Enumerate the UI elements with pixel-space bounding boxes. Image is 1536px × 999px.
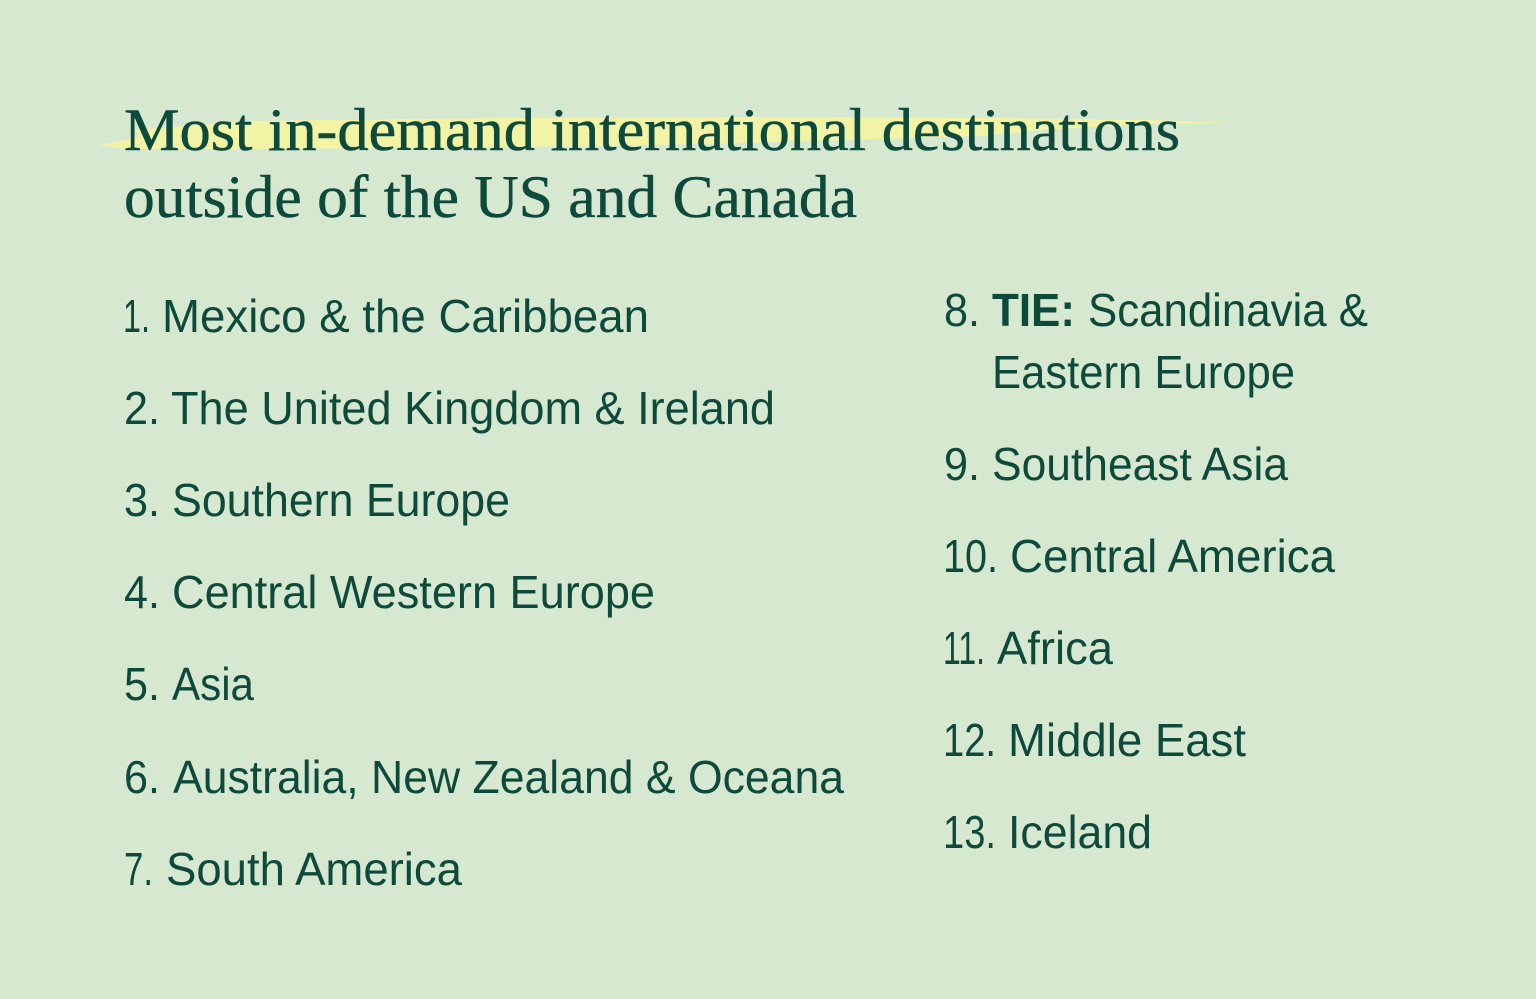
- item 6: Australia, New Zealand & Oceana: [173, 751, 844, 803]
- item 4: Central Western Europe: [172, 566, 655, 618]
- item 11: Africa: [997, 622, 1113, 674]
- item 5: [124, 658, 254, 710]
- item 5: 5.: [124, 658, 160, 710]
- item 8: Scandinavia &: [1088, 284, 1368, 336]
- item 6: 6.: [124, 751, 160, 803]
- item 11: 11.: [943, 622, 985, 674]
- item 7: 7.: [124, 843, 153, 895]
- item 10: 10.: [943, 530, 998, 582]
- title: outside of the US and Canada: [124, 164, 857, 230]
- item 5: Asia: [172, 658, 254, 710]
- item 13: [943, 806, 1152, 858]
- item 1: 1.: [123, 290, 150, 342]
- item 12: 12.: [943, 714, 996, 766]
- item 2: The United Kingdom & Ireland: [171, 382, 775, 434]
- item 8: TIE:: [992, 284, 1075, 336]
- item 8: Eastern Europe: [992, 346, 1295, 398]
- item 8: 8.: [944, 284, 980, 336]
- item 12: Middle East: [1008, 714, 1246, 766]
- item 8: [944, 284, 1368, 398]
- title: [124, 97, 1180, 230]
- title: Most in-demand international destinations: [124, 97, 1180, 163]
- item 13: 13.: [943, 806, 996, 858]
- item 10: Central America: [1010, 530, 1335, 582]
- item 9: 9.: [944, 438, 980, 490]
- item 7: South America: [166, 843, 462, 895]
- left column list: [123, 290, 844, 895]
- item 11: [943, 622, 1113, 674]
- item 4: 4.: [124, 566, 160, 618]
- item 9: Southeast Asia: [992, 438, 1288, 490]
- item 2: 2.: [124, 382, 160, 434]
- item 13: Iceland: [1008, 806, 1152, 858]
- title highlight brush stroke: [99, 117, 1236, 149]
- right column list: [943, 284, 1368, 858]
- item 3: Southern Europe: [172, 474, 510, 526]
- item 3: 3.: [124, 474, 160, 526]
- item 1: Mexico & the Caribbean: [162, 290, 649, 342]
